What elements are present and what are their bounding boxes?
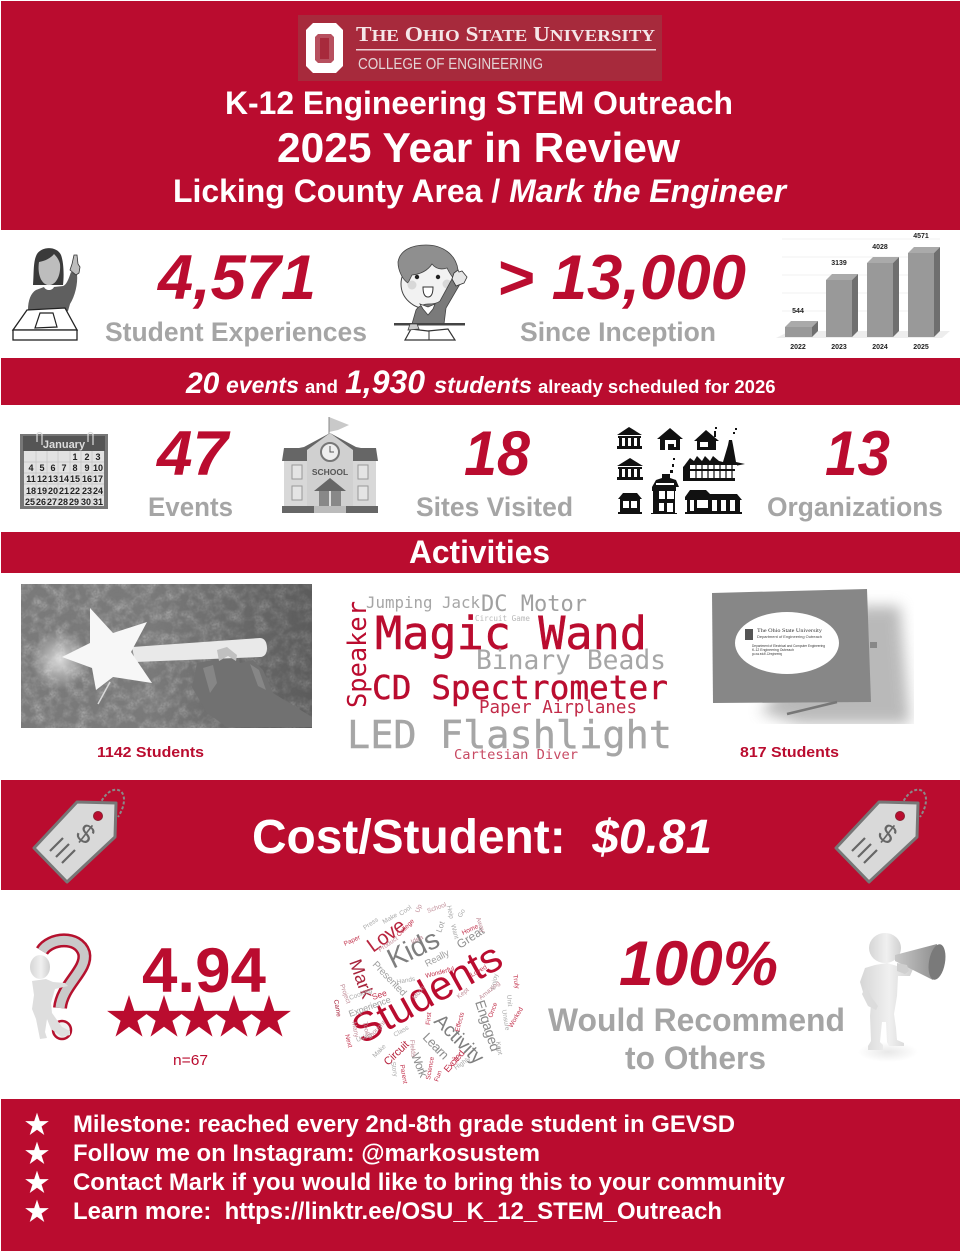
icon: calendar: 18: [26, 486, 36, 496]
small filler words: Came: [332, 999, 342, 1018]
icon: calendar: 17: [93, 474, 103, 484]
statistic: would recommend: Would Recommend: [548, 1002, 845, 1038]
logo: Ohio State University College of Engineering: [298, 15, 662, 81]
statistic: would recommend: [548, 929, 845, 1076]
small filler words: Kept: [456, 986, 471, 1001]
small filler words: Unsure: [500, 1009, 511, 1031]
icon: price tag right: $: [872, 817, 903, 850]
statistic: events: [148, 419, 233, 522]
word cloud: feedback: See: [371, 988, 388, 1002]
bar: 2025: [908, 247, 940, 337]
icon: calendar: 30: [81, 497, 91, 507]
value and year labels: 544: [792, 308, 804, 315]
small filler words: Cool: [398, 904, 414, 918]
bar chart: students per year: [776, 233, 950, 351]
small filler words: Loved: [470, 964, 489, 979]
word cloud: feedback: Learn: [420, 1030, 452, 1062]
small filler words: School: [426, 901, 448, 915]
banner: scheduled for 2026: and: [305, 376, 338, 397]
value and year labels: 2022: [790, 344, 806, 351]
small filler words: Enjoy: [490, 972, 500, 990]
statistic: events: 47: [155, 419, 231, 489]
caption: spectrometer students: 817 Students: [740, 745, 839, 761]
icon: calendar: 26: [36, 497, 46, 507]
house three: [694, 430, 719, 450]
banner: activities heading: [1, 532, 960, 573]
small filler words: Class: [392, 1024, 411, 1039]
small filler words: [332, 901, 525, 1084]
small filler words: Took: [361, 1021, 370, 1037]
small filler words: Go: [457, 908, 467, 919]
banner: cost per student: Cost/Student: $0.81: [252, 811, 712, 864]
icon: school building: SCHOOL: [312, 467, 348, 477]
statistic: rating: 4.94: [142, 936, 266, 1006]
statistic: since inception: > 13,000: [497, 243, 746, 313]
statistic: since inception: [497, 243, 746, 347]
icon: calendar: 31: [93, 497, 103, 507]
small filler words: Project: [338, 983, 352, 1005]
note: learn more: Learn more: https://linktr.ee/OSU_K_12_STEM_Outreach: [73, 1198, 722, 1225]
note: instagram: Follow me on Instagram: @markosustem: [73, 1140, 540, 1167]
small filler words: Truly: [511, 974, 521, 990]
statistic: events: Events: [148, 492, 233, 522]
value and year labels: 4028: [872, 244, 888, 251]
panel: footer notes: [1, 1099, 960, 1251]
photo: CD spectrometer box: [712, 588, 914, 724]
statistic: sites visited: [416, 419, 573, 522]
statistic: would recommend: 100%: [619, 929, 778, 999]
small filler words: Home: [461, 923, 480, 937]
banner: cost per student: [1, 780, 960, 890]
small filler words: Kept: [494, 1041, 503, 1056]
icon: calendar: 4: [28, 463, 34, 473]
bar: 2024: [867, 257, 899, 337]
word cloud: activities: Speaker: [343, 601, 373, 708]
small filler words: Cooking: [348, 987, 373, 1002]
bar: 2023: [826, 274, 858, 337]
word cloud: feedback: Excited: [442, 1048, 467, 1075]
icon: calendar: 29: [69, 497, 79, 507]
word cloud: feedback: Great: [454, 923, 487, 952]
statistic: student experiences: 4,571: [156, 243, 316, 313]
word cloud: feedback: [332, 901, 525, 1084]
logo: Ohio State University College of Engineering: THE OHIO STATE UNIVERSITY: [356, 22, 655, 46]
icon: calendar: [20, 432, 108, 509]
small filler words: First: [425, 1012, 433, 1025]
icon: calendar: 5: [39, 463, 45, 473]
icon: calendar: 28: [58, 497, 68, 507]
icon: calendar: 23: [82, 486, 92, 496]
icon: calendar: 3: [95, 452, 101, 462]
small filler words: Unit: [505, 995, 513, 1007]
small filler words: Fun: [433, 1069, 444, 1083]
factory: [683, 440, 745, 481]
photo: CD spectrometer box: Department of Engineering Outreach: [757, 635, 822, 639]
small filler words: Press: [362, 916, 380, 932]
logo: Ohio State University College of Engineering: COLLEGE OF ENGINEERING: [358, 56, 543, 73]
statistic: student experiences: Student Experiences: [105, 317, 367, 347]
value and year labels: [790, 233, 929, 351]
icon: calendar: 6: [50, 463, 56, 473]
tall building: [651, 474, 679, 514]
small filler words: Product: [377, 935, 400, 954]
word cloud: feedback: Experience: [347, 994, 392, 1019]
icon: calendar: 22: [70, 486, 80, 496]
icon: calendar: 16: [82, 474, 92, 484]
icon: calendar: 9: [84, 463, 90, 473]
banner: scheduled for 2026: [1, 358, 960, 405]
banner: activities heading: Activities: [409, 534, 550, 570]
five stars: [107, 995, 291, 1037]
word cloud: feedback: Really: [423, 948, 452, 970]
banner: scheduled for 2026: 1,930: [345, 364, 425, 400]
small filler words: Using: [355, 1031, 374, 1044]
icon: price tag left: $: [70, 817, 101, 850]
photo: CD spectrometer box: Department of Electrical and Computer Engineering: [752, 644, 825, 648]
subtitle: area and presenter: Licking County Area / Mark the Engineer: [173, 173, 788, 209]
icon: calendar: 8: [72, 463, 78, 473]
small filler words: Help: [445, 905, 455, 920]
statistic: rating: n=67: [173, 1052, 208, 1069]
small filler words: Many: [350, 1021, 360, 1039]
value and year labels: 4571: [913, 233, 929, 240]
word cloud: activities: CD Spectrometer: [372, 669, 668, 707]
small filler words: Want: [449, 924, 460, 940]
heading: program name: K-12 Engineering STEM Outreach: [225, 85, 733, 121]
value and year labels: 2024: [872, 344, 888, 351]
wide building: [685, 490, 742, 514]
small filler words: Amazing: [478, 980, 502, 1002]
panel: header: [1, 1, 960, 230]
small filler words: Effects: [454, 1011, 466, 1033]
small filler words: Make: [371, 1043, 388, 1059]
word cloud: activities: Binary Beads: [476, 646, 666, 676]
icon: figure with question mark: [30, 940, 84, 1039]
statistic: organizations: [767, 419, 943, 522]
note: contact: Contact Mark if you would like to bring this to your community: [73, 1169, 786, 1196]
icon: school building: [282, 417, 378, 513]
bar: 2022: [785, 321, 818, 337]
word cloud: feedback: Lot: [434, 919, 447, 934]
small filler words: Paper: [343, 934, 362, 948]
word cloud: activities: LED Flashlight: [347, 713, 672, 758]
statistic: would recommend: to Others: [625, 1040, 766, 1076]
small filler words: Thought: [365, 1019, 387, 1041]
star bullets: [25, 1113, 49, 1222]
icon: calendar: 13: [48, 474, 58, 484]
small filler words: College: [395, 918, 416, 938]
word cloud: activities: [343, 592, 672, 763]
word cloud: feedback: Engaged: [472, 998, 504, 1053]
caption: magic wand students: 1142 Students: [97, 745, 204, 761]
icon: calendar: 20: [48, 486, 58, 496]
title: 2025 year in review: 2025 Year in Review: [277, 124, 680, 171]
icon: calendar: 12: [37, 474, 47, 484]
statistic: student experiences: [105, 243, 367, 347]
small filler words: Idea: [410, 934, 425, 946]
small shop: [618, 493, 642, 514]
photo: CD spectrometer box: The Ohio State University: [757, 629, 823, 634]
word cloud: feedback: Mark: [345, 957, 378, 1002]
note: milestone: Milestone: reached every 2nd-8th grade student in GEVSD: [73, 1111, 735, 1138]
statistic: sites visited: 18: [464, 419, 530, 489]
word cloud: feedback: Students: [344, 933, 510, 1053]
photo: CD spectrometer box: go.osu.edu/K-12engineering: [752, 652, 782, 656]
icon: calendar: 24: [93, 486, 103, 496]
statistic: rating: [107, 936, 291, 1069]
small filler words: Worked: [508, 1006, 525, 1029]
icon: calendar: 2: [84, 452, 90, 462]
banner: scheduled for 2026: students: [434, 372, 532, 398]
small filler words: Hands: [396, 976, 417, 986]
icon: community buildings: [617, 427, 745, 514]
word cloud: activities: Paper Airplanes: [479, 698, 637, 718]
word cloud: activities: Magic Wand: [375, 607, 647, 660]
small filler words: Up: [414, 903, 424, 914]
small filler words: Fields: [408, 1040, 417, 1058]
statistic: organizations: 13: [825, 419, 890, 489]
banner: scheduled for 2026: 20: [185, 367, 220, 400]
icon: price tag right: [836, 790, 926, 882]
word cloud: activities: DC Motor: [481, 592, 587, 617]
statistic: sites visited: Sites Visited: [416, 492, 573, 522]
photo: CD spectrometer box: K-12 Engineering Outreach: [752, 648, 794, 652]
icon: calendar: 21: [59, 486, 69, 496]
value and year labels: 2025: [913, 344, 929, 351]
icon: calendar: 11: [26, 474, 36, 484]
house two: [657, 428, 683, 450]
word cloud: feedback: Circuit: [382, 1039, 412, 1068]
icon: calendar: 14: [59, 474, 69, 484]
word cloud: activities: Circuit Game: [475, 614, 530, 623]
statistic: organizations: Organizations: [767, 492, 943, 522]
banner: scheduled for 2026: already scheduled for 2026: [538, 376, 776, 397]
icon: calendar: 1: [72, 452, 78, 462]
word cloud: feedback: Work: [408, 1051, 431, 1080]
icon: calendar: January: [43, 439, 86, 451]
icon: calendar: 10: [93, 463, 103, 473]
value and year labels: 3139: [831, 260, 847, 267]
small filler words: Away: [474, 916, 486, 934]
icon: student raising hand: [394, 245, 467, 340]
photo: magic wand: [21, 584, 312, 728]
word cloud: activities: Cartesian Diver: [454, 747, 578, 763]
small filler words: Once: [487, 1001, 499, 1019]
word cloud: feedback: Kids: [382, 923, 444, 974]
value and year labels: 2023: [831, 344, 847, 351]
icon: calendar: 19: [37, 486, 47, 496]
small filler words: Story: [389, 1061, 399, 1078]
icon: calendar: 25: [25, 497, 35, 507]
bank one: [617, 427, 642, 449]
icon: figure with megaphone: [858, 933, 948, 1062]
word cloud: activities: Jumping Jack: [366, 593, 480, 612]
small filler words: Wonderful: [425, 965, 456, 980]
icon: price tag left: [34, 790, 124, 882]
word cloud: feedback: Presented: [370, 959, 408, 999]
icon: calendar: 15: [70, 474, 80, 484]
icon: teacher at desk: [13, 248, 80, 340]
small filler words: Science: [425, 1056, 436, 1080]
bank two: [617, 458, 643, 480]
icon: calendar: 7: [61, 463, 67, 473]
icon: calendar: 27: [47, 497, 57, 507]
small filler words: Highly: [453, 1055, 473, 1072]
word cloud: feedback: Love: [363, 915, 410, 957]
small filler words: Make: [382, 912, 399, 926]
word cloud: feedback: Activity: [429, 1010, 488, 1069]
statistic: since inception: Since Inception: [520, 317, 716, 347]
banner: scheduled for 2026: events: [226, 372, 299, 398]
small filler words: Next: [343, 1034, 353, 1049]
small filler words: Much: [411, 984, 427, 1001]
small filler words: Parent: [398, 1064, 408, 1084]
